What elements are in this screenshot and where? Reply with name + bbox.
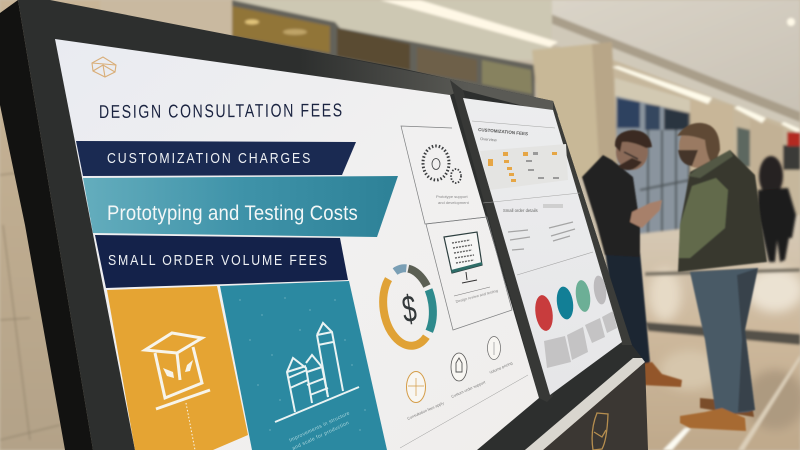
icon: gold emblem	[592, 413, 608, 450]
icon: cube logo	[92, 57, 116, 77]
card: monitor diagram: Design review and testing	[455, 289, 498, 304]
card: gear diagram	[401, 126, 487, 224]
circle row	[533, 275, 608, 332]
banner: customization charges	[76, 141, 356, 176]
card: gear diagram: Prototype support	[436, 194, 468, 199]
heading: design consultation fees: DESIGN CONSULTATION FEES	[99, 101, 342, 123]
banner: small order volume fees: SMALL ORDER VOLUME FEES	[108, 252, 327, 268]
boot	[642, 362, 682, 387]
stone top wall	[40, 0, 232, 40]
ceiling lights	[612, 66, 712, 104]
frame shadow side	[0, 0, 93, 450]
floor	[630, 215, 800, 450]
ceiling beam	[385, 0, 800, 135]
grey boxes	[544, 311, 617, 368]
icon row: circular icons: Volume pricing	[489, 361, 513, 375]
icon: monitor	[444, 232, 482, 283]
banner: small order volume fees	[95, 235, 348, 288]
small caption: Improvements in structure	[288, 410, 351, 444]
left stone wall	[0, 0, 100, 450]
divider between panels	[450, 80, 553, 402]
red exit sign	[787, 132, 800, 146]
front shoe	[680, 408, 746, 431]
right panel frame	[553, 101, 632, 345]
top table area	[472, 121, 580, 203]
panel: main left board	[55, 39, 539, 450]
panel: orange tile	[107, 286, 248, 450]
bright ceiling light 1	[380, 0, 558, 47]
back shoe	[700, 398, 754, 417]
line	[400, 375, 528, 448]
middle text block: Small order details	[503, 208, 538, 213]
icon row: circular icons	[406, 336, 513, 421]
chart: donut ring: $	[399, 287, 419, 331]
icon row: circular icons: Consultation fees apply	[407, 401, 445, 421]
person: woman in background	[757, 156, 796, 262]
panel: right board	[463, 98, 622, 395]
banner: customization charges: CUSTOMIZATION CHARGES	[107, 150, 310, 166]
stone pillar	[532, 42, 618, 180]
frame body	[18, 0, 642, 450]
top table area: CUSTOMIZATION FEES	[478, 127, 528, 136]
banner: prototyping and testing costs: Prototyping and Testing Costs	[107, 202, 358, 225]
card: gear diagram: and development	[438, 200, 470, 205]
texture: speckles	[239, 297, 366, 431]
chart: donut ring	[378, 265, 438, 349]
top table area: Overview	[480, 136, 497, 142]
window row	[232, 0, 535, 110]
icon: box on stand	[145, 333, 210, 450]
banner: prototyping and testing costs	[83, 176, 398, 237]
base: kiosk pedestal	[525, 358, 648, 450]
icon row: circular icons: Custom order support	[451, 380, 487, 399]
person: man looking at phone	[582, 130, 682, 387]
pillars right	[690, 100, 736, 225]
ceiling	[497, 0, 800, 120]
upper wall band	[232, 0, 552, 60]
glass window	[616, 96, 690, 240]
card: monitor diagram	[426, 217, 512, 330]
frame top band right part	[300, 49, 558, 115]
jeans	[690, 268, 758, 415]
right wall beyond	[600, 55, 800, 245]
person: man in vest	[677, 123, 767, 431]
panel: teal tile	[220, 281, 387, 450]
icon: gears	[423, 146, 461, 183]
icon: buildings	[275, 323, 359, 422]
middle text block	[503, 204, 593, 275]
